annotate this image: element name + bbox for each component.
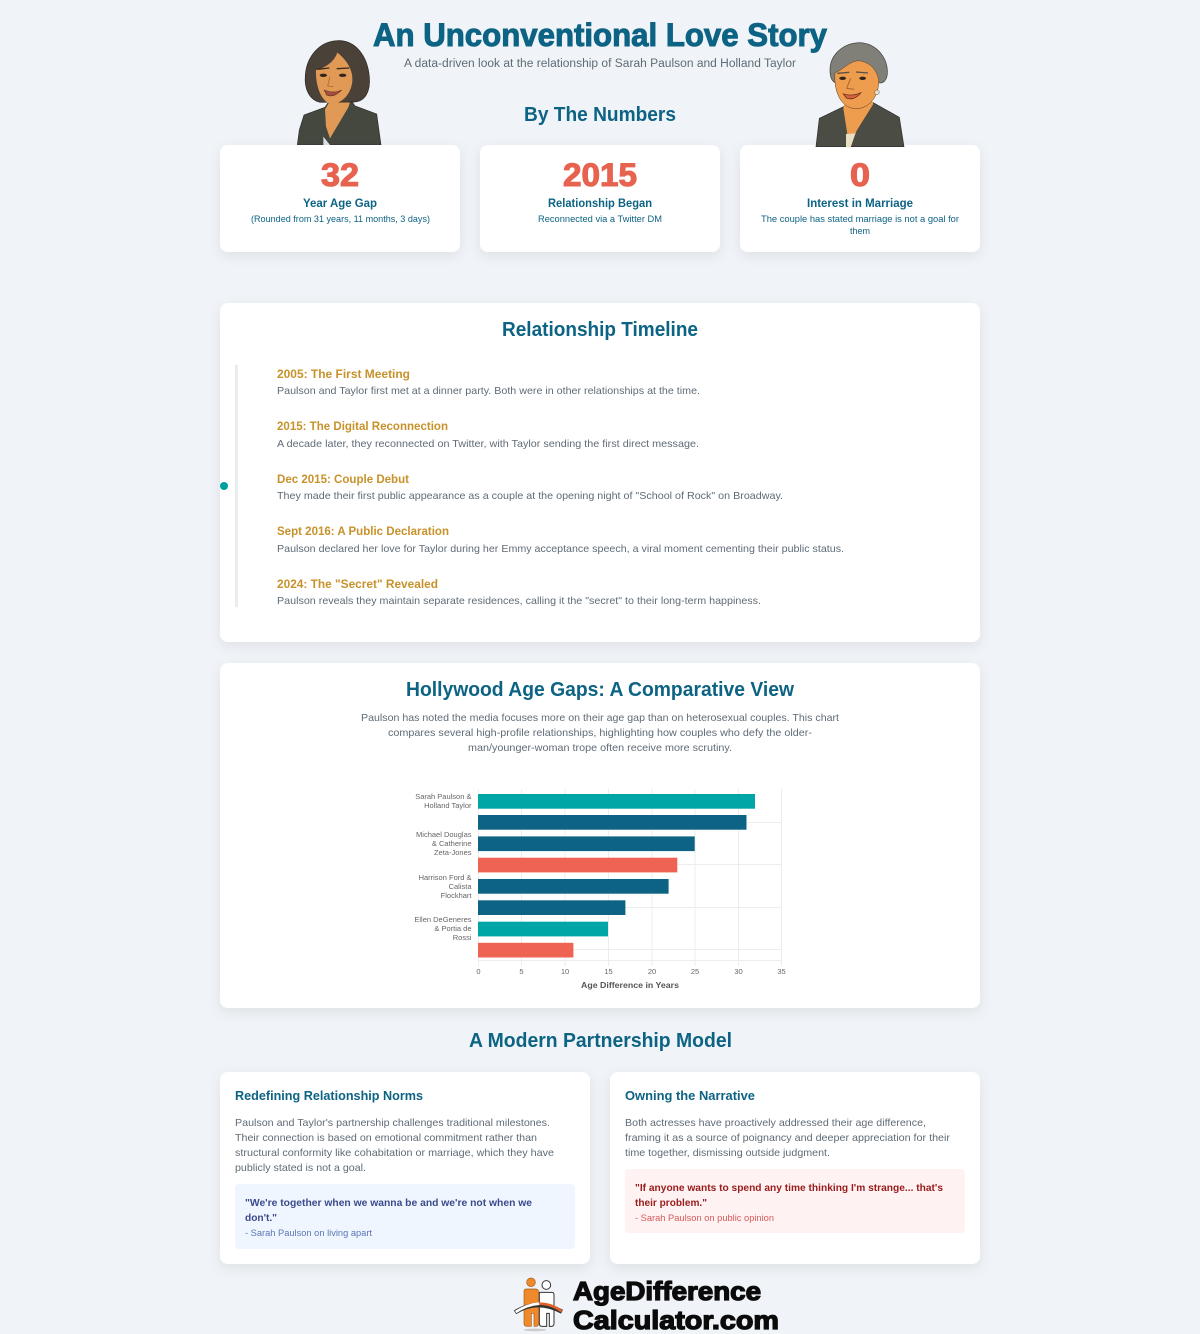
category labels: & Catherine bbox=[432, 839, 472, 848]
panel: stat interest in marriage: 0 bbox=[850, 157, 870, 193]
icon: Sarah Paulson portrait bbox=[297, 41, 381, 145]
timeline event Dec 2015: They made their first public appearance as a couple at the opening night of "School of Rock" on Broadway. bbox=[277, 490, 783, 502]
panel: stat interest in marriage: The couple has stated marriage is not a goal for bbox=[761, 214, 959, 224]
logo: AgeDifferenceCalculator.com bbox=[515, 1276, 779, 1334]
chart description: compares several high-profile relationships, highlighting how couples who defy the older- bbox=[388, 727, 813, 739]
category labels: Sarah Paulson & bbox=[415, 792, 472, 801]
icon: Holland Taylor portrait bbox=[816, 43, 904, 147]
timeline event Sept 2016: Sept 2016: A Public Declaration bbox=[277, 526, 449, 538]
title: An Unconventional Love Story bbox=[373, 17, 827, 53]
timeline event 2015: 2015: The Digital Reconnection bbox=[277, 421, 448, 433]
axis ticks: 5 bbox=[519, 967, 524, 976]
chart description bbox=[361, 712, 839, 754]
category labels: Michael Douglas bbox=[416, 830, 472, 839]
callout: blue quote: - Sarah Paulson on living apart bbox=[245, 1228, 373, 1238]
timeline event Dec 2015 bbox=[277, 474, 783, 502]
body text: Both actresses have proactively addressed their age difference, bbox=[625, 1117, 926, 1129]
bar chart bbox=[414, 789, 786, 990]
category labels: Harrison Ford & bbox=[419, 873, 472, 882]
body text: time together, dismissing outside judgment. bbox=[625, 1147, 830, 1159]
timeline event Dec 2015: Dec 2015: Couple Debut bbox=[277, 474, 409, 486]
icon: two figures bbox=[515, 1278, 562, 1331]
panel: relationship timeline bbox=[220, 303, 980, 642]
body text: Paulson and Taylor's partnership challenges traditional milestones. bbox=[235, 1117, 550, 1129]
panel: redefining relationship norms bbox=[220, 1072, 590, 1264]
panel: stat year age gap: Year Age Gap bbox=[303, 196, 377, 210]
timeline event 2005 bbox=[277, 369, 700, 397]
timeline event 2024: 2024: The "Secret" Revealed bbox=[277, 579, 438, 591]
body text: structural conformity like cohabitation or marriage, which they have bbox=[235, 1147, 554, 1159]
body text: Their connection is based on emotional commitment rather than bbox=[235, 1132, 537, 1144]
timeline marker dot bbox=[220, 482, 228, 490]
panel: redefining relationship norms: Redefining Relationship Norms bbox=[235, 1088, 423, 1103]
timeline event 2024 bbox=[277, 579, 761, 607]
axis ticks bbox=[476, 967, 786, 976]
panel: stat relationship began: Reconnected via a Twitter DM bbox=[538, 214, 662, 224]
category labels: Rossi bbox=[453, 933, 472, 942]
axis ticks: 30 bbox=[734, 967, 743, 976]
heading: a modern partnership model: A Modern Partnership Model bbox=[469, 1030, 732, 1052]
axis ticks: 0 bbox=[476, 967, 481, 976]
panel: stat year age gap: (Rounded from 31 years, 11 months, 3 days) bbox=[251, 214, 430, 224]
panel: stat year age gap bbox=[220, 145, 460, 252]
timeline event 2015: A decade later, they reconnected on Twitter, with Taylor sending the first direct message. bbox=[277, 438, 699, 450]
heading: By The Numbers: By The Numbers bbox=[524, 104, 676, 126]
callout: red quote: their problem." bbox=[635, 1197, 707, 1209]
category labels: Calista bbox=[449, 882, 472, 891]
timeline event Sept 2016 bbox=[277, 526, 844, 555]
category labels: Zeta-Jones bbox=[434, 848, 472, 857]
axis ticks: 35 bbox=[777, 967, 786, 976]
body text bbox=[235, 1117, 554, 1174]
body text: framing it as a source of poignancy and deeper appreciation for their bbox=[625, 1132, 951, 1144]
axis ticks: 15 bbox=[604, 967, 613, 976]
subtitle: A data-driven look at the relationship of Sarah Paulson and Holland Taylor bbox=[404, 58, 796, 70]
chart description: Paulson has noted the media focuses more on their age gap than on heterosexual couples. This chart bbox=[361, 712, 839, 724]
category labels: & Portia de bbox=[434, 924, 472, 933]
panel: stat interest in marriage bbox=[740, 145, 980, 252]
callout: red quote: - Sarah Paulson on public opinion bbox=[635, 1213, 774, 1223]
panel: stat relationship began: 2015 bbox=[563, 157, 637, 193]
callout: blue quote: "We're together when we wanna be and we're not when we bbox=[245, 1197, 532, 1209]
category labels bbox=[414, 792, 472, 942]
timeline event 2005: 2005: The First Meeting bbox=[277, 369, 410, 381]
panel: stat interest in marriage: Interest in Marriage bbox=[807, 196, 913, 210]
timeline event 2005: Paulson and Taylor first met at a dinner party. Both were in other relationships at the time. bbox=[277, 385, 700, 397]
timeline event 2015 bbox=[277, 421, 699, 450]
bars bbox=[478, 794, 755, 958]
panel: hollywood age gaps bbox=[220, 663, 980, 1008]
category labels: Flockhart bbox=[441, 891, 472, 900]
heading: hollywood age gaps: Hollywood Age Gaps: A Comparative View bbox=[406, 679, 794, 701]
category labels: Ellen DeGeneres bbox=[414, 915, 472, 924]
heading: relationship timeline: Relationship Timeline bbox=[502, 319, 698, 341]
panel: stat interest in marriage: them bbox=[850, 226, 870, 236]
axis ticks: 25 bbox=[691, 967, 699, 976]
panel: stat relationship began bbox=[480, 145, 720, 252]
panel: owning the narrative bbox=[610, 1072, 980, 1264]
logo: AgeDifferenceCalculator.com: AgeDifference bbox=[573, 1276, 761, 1306]
panel: stat year age gap: 32 bbox=[321, 157, 359, 193]
timeline event 2024: Paulson reveals they maintain separate residences, calling it the "secret" to their long-term happiness. bbox=[277, 595, 761, 607]
body text: publicly stated is not a goal. bbox=[235, 1162, 366, 1174]
axis ticks: 20 bbox=[648, 967, 656, 976]
callout: blue quote bbox=[235, 1184, 575, 1249]
callout: blue quote: don't." bbox=[245, 1212, 277, 1224]
timeline event Sept 2016: Paulson declared her love for Taylor during her Emmy acceptance speech, a viral moment cementing their public status. bbox=[277, 543, 844, 555]
body text bbox=[625, 1117, 951, 1159]
panel: owning the narrative: Owning the Narrative bbox=[625, 1088, 755, 1103]
axis ticks: 10 bbox=[561, 967, 569, 976]
category labels: Holland Taylor bbox=[424, 801, 472, 810]
panel: stat relationship began: Relationship Began bbox=[548, 196, 652, 210]
chart description: man/younger-woman trope often receive more scrutiny. bbox=[468, 742, 732, 754]
callout: red quote bbox=[625, 1169, 965, 1233]
callout: red quote: "If anyone wants to spend any time thinking I'm strange... that's bbox=[635, 1182, 943, 1194]
axis title: Age Difference in Years bbox=[581, 980, 679, 990]
